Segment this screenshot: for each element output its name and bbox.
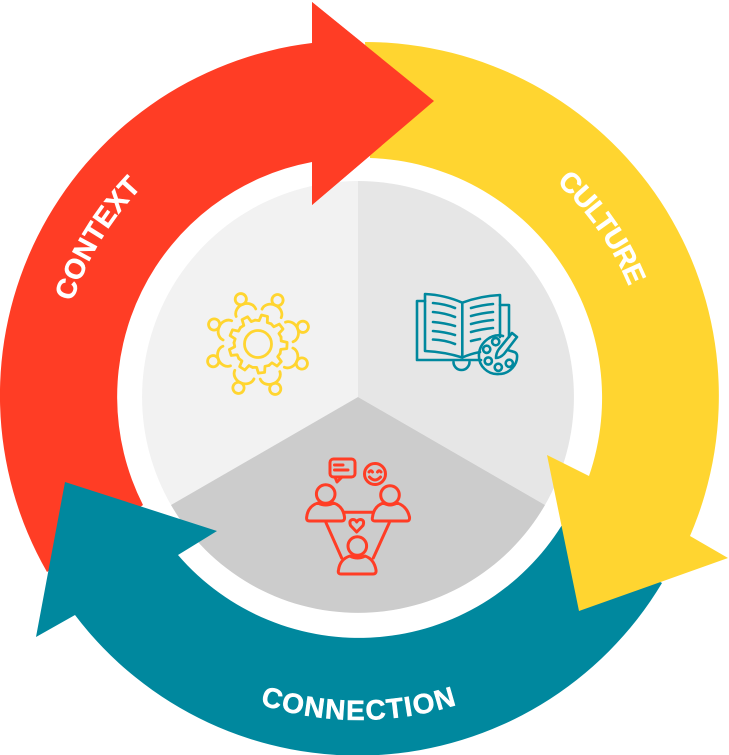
icon: connected people [307,459,410,574]
icon: open book and palette [417,294,517,374]
central pie [142,181,574,613]
pie segment: context [142,181,358,505]
label: context: CONTEXT [56,174,138,298]
arrowhead: context overlapping culture [312,2,434,205]
label: culture: CULTURE [560,172,646,286]
arrow: culture (yellow) [365,42,728,611]
label: connection: CONNECTION [262,686,456,720]
icon: gear with people [204,290,312,398]
arrow: connection (teal) [36,482,662,755]
pie segment: culture [358,181,574,505]
pie segment: connection [171,397,545,613]
arrow: context (red) [0,2,434,572]
